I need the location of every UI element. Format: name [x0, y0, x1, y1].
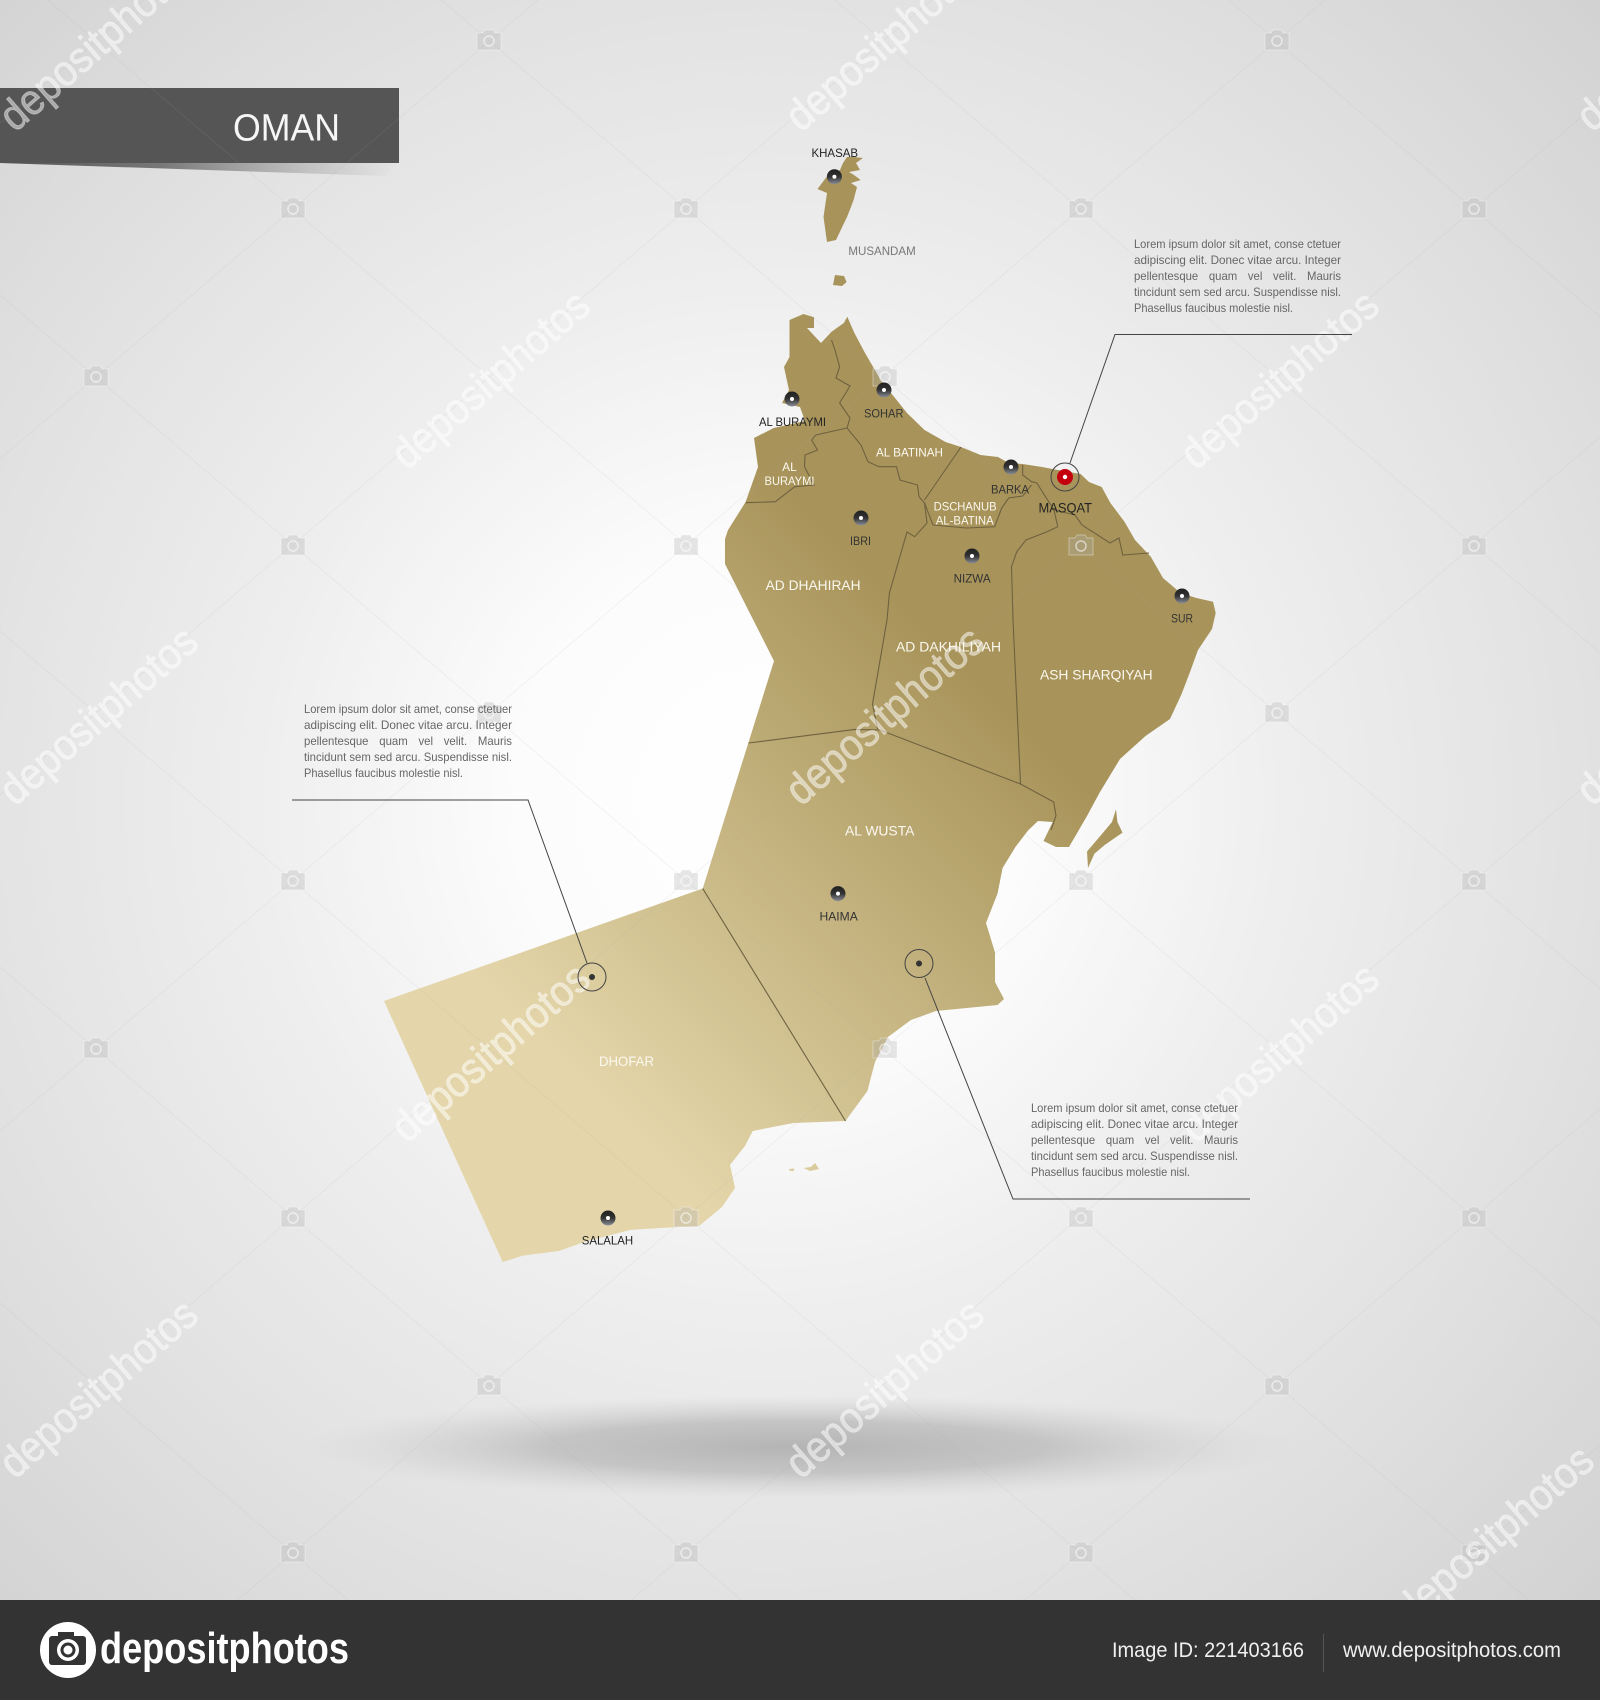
- paragraph: [1031, 1101, 1238, 1179]
- paragraph: tincidunt sem sed arcu. Suspendisse nisl.: [304, 750, 512, 764]
- city labels: SUR: [1171, 611, 1193, 625]
- paragraph: Lorem ipsum dolor sit amet, conse ctetuer: [304, 702, 512, 716]
- marker: [905, 950, 933, 978]
- paragraph: tincidunt sem sed arcu. Suspendisse nisl.: [1031, 1149, 1238, 1163]
- region labels: BURAYMI: [764, 474, 814, 488]
- callout: top right: [1070, 237, 1352, 463]
- paragraph: Phasellus faucibus molestie nisl.: [1031, 1165, 1190, 1179]
- island: Musandam south: [833, 275, 847, 286]
- website: www.depositphotos.com: [1342, 1639, 1561, 1662]
- paragraph: pellentesque quam vel velit. Mauris: [1134, 269, 1341, 283]
- region labels: DSCHANUB: [934, 499, 997, 513]
- region labels: AL-BATINA: [936, 513, 994, 527]
- ground shadow: [297, 1395, 1297, 1499]
- region: Musandam: [818, 157, 863, 242]
- watermark text: depositphotos: [776, 617, 993, 815]
- region borders: [703, 340, 1149, 1121]
- map of Oman: [384, 157, 1216, 1262]
- watermark text: depositphotos: [776, 1290, 993, 1488]
- paragraph: Phasellus faucibus molestie nisl.: [1134, 301, 1293, 315]
- city labels: AL BURAYMI: [759, 415, 826, 429]
- image id: Image ID: 221403166: [1112, 1639, 1304, 1662]
- footer logo text: depositphotos: [100, 1624, 349, 1673]
- callout: bottom right: [905, 950, 1250, 1199]
- footer logo icon: [40, 1622, 96, 1678]
- city labels: SOHAR: [864, 406, 904, 420]
- city labels: BARKA: [991, 482, 1029, 496]
- city labels: NIZWA: [954, 572, 991, 586]
- city labels: MASQAT: [1038, 500, 1092, 516]
- region labels: DHOFAR: [599, 1053, 654, 1069]
- title banner: [0, 88, 399, 176]
- region labels: [599, 244, 1153, 1069]
- paragraph: adipiscing elit. Donec vitae arcu. Integer: [1031, 1117, 1238, 1131]
- banner shadow: [0, 163, 399, 176]
- watermark cameras: [84, 30, 1486, 1562]
- leader line: [292, 800, 587, 963]
- region labels: MUSANDAM: [848, 244, 916, 258]
- paragraph: pellentesque quam vel velit. Mauris: [1031, 1133, 1238, 1147]
- mainland Oman: [384, 314, 1216, 1262]
- paragraph: pellentesque quam vel velit. Mauris: [304, 734, 512, 748]
- paragraph: tincidunt sem sed arcu. Suspendisse nisl.: [1134, 285, 1341, 299]
- region labels: AL BATINAH: [876, 445, 943, 459]
- city labels: IBRI: [850, 534, 871, 548]
- footer divider: [1323, 1634, 1324, 1672]
- island: Masirah: [1087, 809, 1122, 868]
- leader line: [925, 978, 1250, 1199]
- watermark text: depositphotos: [382, 281, 599, 479]
- watermark text: depositphotos: [382, 954, 599, 1152]
- footer bar: [0, 1600, 1600, 1700]
- paragraph: Lorem ipsum dolor sit amet, conse ctetuer: [1031, 1101, 1238, 1115]
- watermark text: depositphotos: [1171, 954, 1388, 1152]
- city labels: SALALAH: [582, 1234, 633, 1248]
- title: OMAN: [233, 108, 340, 150]
- capital pin: Masqat: [1051, 463, 1079, 491]
- region labels: AL WUSTA: [845, 822, 915, 838]
- paragraph: [1134, 237, 1341, 315]
- banner bar: [0, 88, 399, 163]
- watermark text: depositphotos: [1171, 281, 1388, 479]
- city labels: [582, 146, 1193, 1248]
- region labels: AL: [782, 460, 797, 474]
- paragraph: adipiscing elit. Donec vitae arcu. Integer: [1134, 253, 1341, 267]
- leader line: [1070, 334, 1352, 463]
- paragraph: Lorem ipsum dolor sit amet, conse ctetuer: [1134, 237, 1341, 251]
- islands: Kuria Muria: [789, 1163, 819, 1171]
- marker: [578, 963, 606, 991]
- city labels: HAIMA: [820, 909, 858, 923]
- paragraph: adipiscing elit. Donec vitae arcu. Integer: [304, 718, 512, 732]
- paragraph: Phasellus faucibus molestie nisl.: [304, 766, 463, 780]
- city labels: KHASAB: [812, 146, 858, 160]
- region labels: ASH SHARQIYAH: [1040, 667, 1153, 683]
- region labels: AD DHAHIRAH: [766, 577, 861, 593]
- callout: left: [292, 702, 606, 991]
- region labels: AD DAKHILIYAH: [896, 638, 1001, 654]
- city pins: [600, 169, 1190, 1226]
- paragraph: [304, 702, 512, 780]
